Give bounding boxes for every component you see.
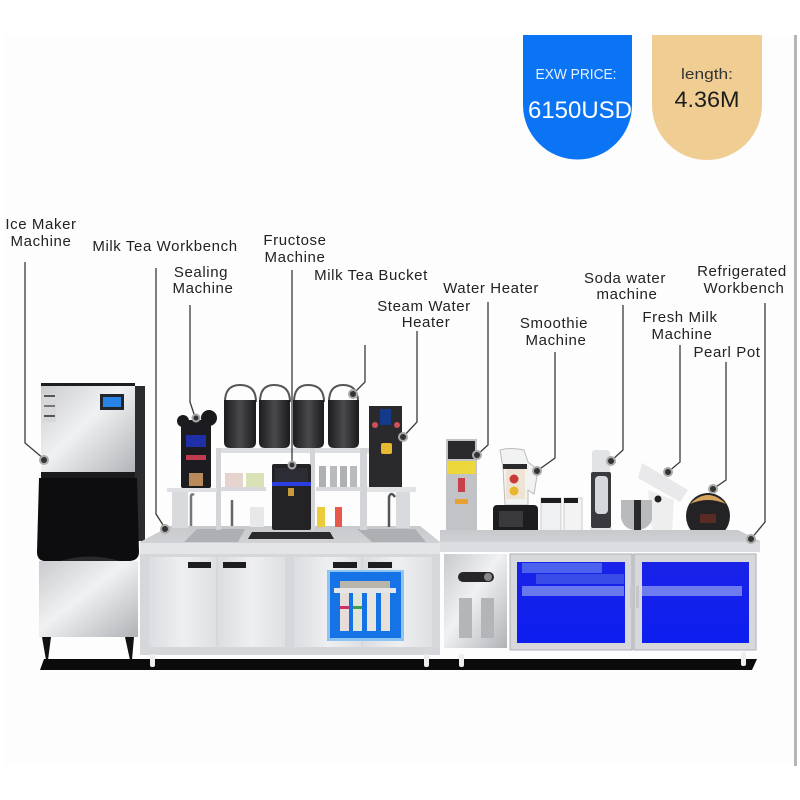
label: Soda water machine: machine [597, 286, 657, 303]
machine: water heater [446, 439, 477, 537]
machine: steam water heater [369, 406, 402, 487]
machine: pearl pot [686, 493, 730, 539]
label: Pearl Pot: Pearl Pot [693, 344, 761, 361]
machine: sealing machine [177, 410, 217, 488]
label: Fresh Milk Machine: Machine [652, 326, 712, 343]
badge: EXW price: 6150USD [528, 97, 632, 124]
label: Soda water machine: Soda water [584, 270, 666, 287]
machine: milk tea buckets [224, 385, 359, 448]
label: Refrigerated Workbench: Workbench [704, 280, 784, 297]
machine: shelving unit [216, 448, 384, 530]
label: Fresh Milk Machine: Fresh Milk [642, 309, 718, 326]
label: Ice Maker Machine: Ice Maker [5, 216, 77, 233]
machine: fresh milk machine [621, 463, 688, 537]
label: Milk Tea Bucket: Milk Tea Bucket [314, 267, 428, 284]
machine: small side shelves with faucets [167, 487, 416, 528]
label: Steam Water Heater: Steam Water [377, 298, 471, 315]
label: Fructose Machine: Machine [265, 249, 325, 266]
label: Water Heater: Water Heater [443, 280, 539, 297]
badge: length [652, 35, 762, 160]
leader lines with dots [25, 262, 765, 543]
machine: ice maker [37, 383, 145, 660]
label: Sealing Machine: Sealing [174, 264, 228, 281]
label: Fructose Machine: Fructose [263, 232, 327, 249]
water filter panel [327, 570, 404, 641]
label: Smoothie Machine: Smoothie [520, 315, 588, 332]
badge: EXW price: EXW PRICE: [536, 67, 616, 83]
label: Refrigerated Workbench: Refrigerated [697, 263, 787, 280]
label: Milk Tea Workbench: Milk Tea Workbench [92, 238, 238, 255]
machine: refrigerated workbench [440, 530, 760, 667]
machine: workbench left [140, 526, 440, 667]
machine: fructose machine [272, 464, 311, 530]
label: Sealing Machine: Machine [173, 280, 233, 297]
machine: soda water machine [590, 450, 612, 534]
floor shadow [40, 659, 757, 670]
machine: smoothie machine [493, 448, 582, 538]
label: Steam Water Heater: Heater [402, 314, 450, 331]
label: Ice Maker Machine: Machine [11, 233, 71, 250]
badge: EXW price [523, 35, 632, 160]
badge: length: 4.36M [674, 87, 740, 112]
label: Smoothie Machine: Machine [526, 332, 586, 349]
badge: length: length: [681, 66, 733, 83]
